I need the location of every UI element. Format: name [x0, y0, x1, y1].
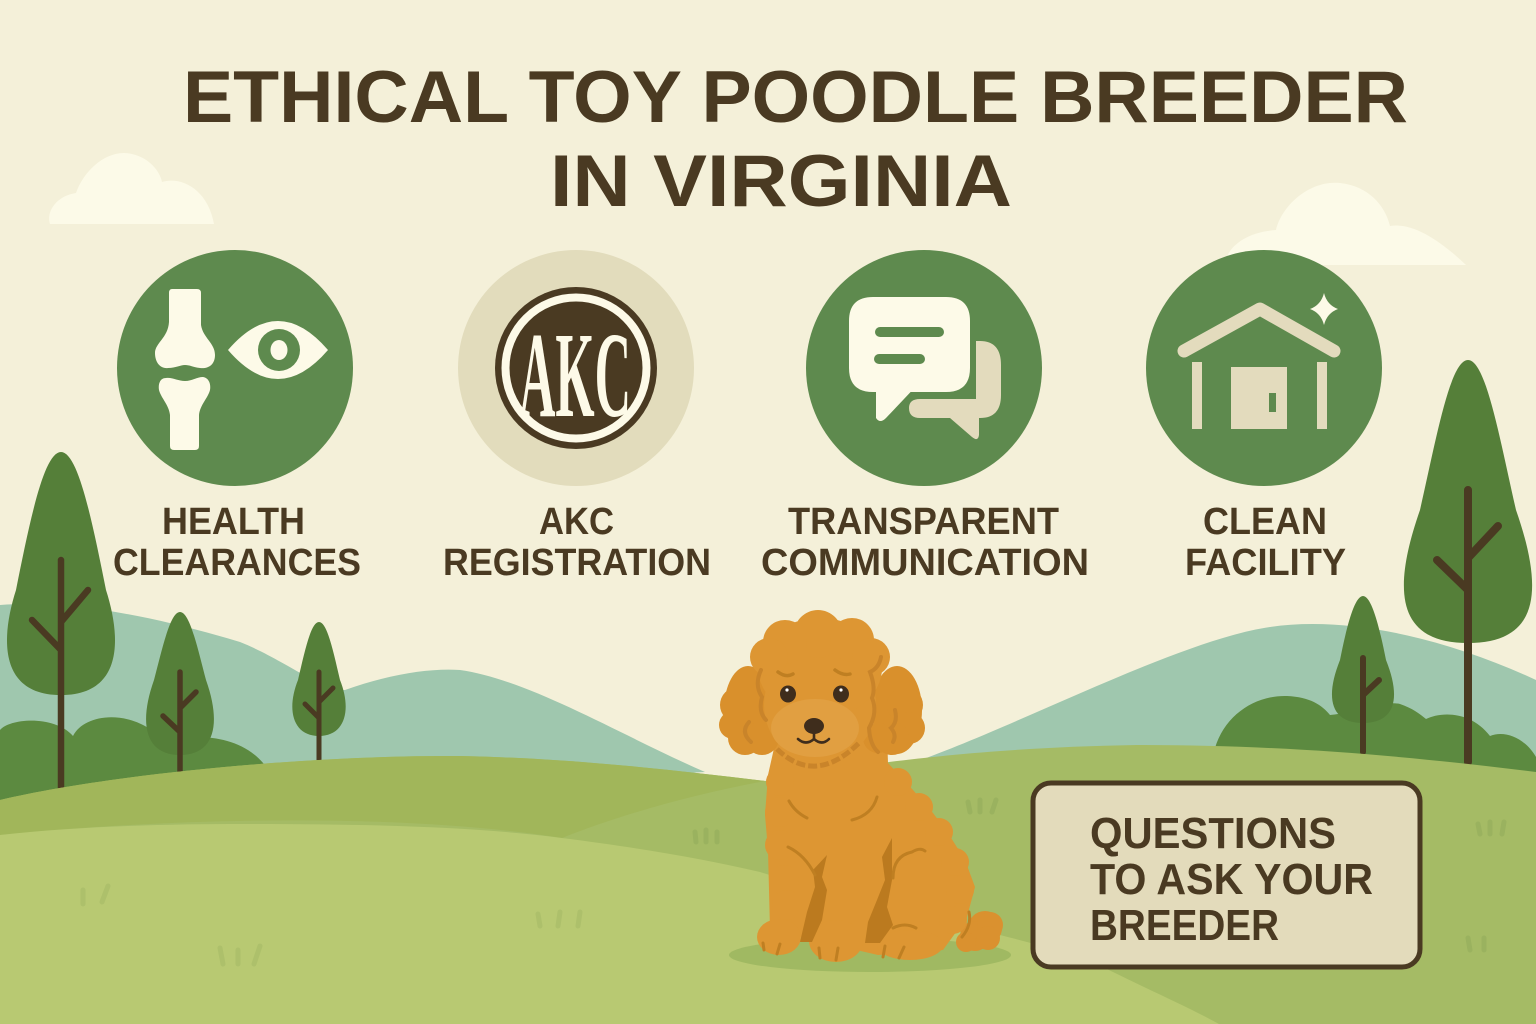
poodle leg gaps	[800, 838, 893, 943]
cloud: right	[1225, 183, 1466, 265]
tree: small left	[146, 612, 214, 775]
label: health clearances: CLEARANCES	[113, 542, 361, 584]
poodle eyes	[780, 686, 849, 702]
callout: questions to ask your breeder: QUESTIONS	[1090, 809, 1336, 858]
landscape: distant hills	[0, 604, 1536, 810]
title line 1: ETHICAL TOY POODLE BREEDER	[183, 57, 1408, 138]
bushes: right	[1215, 696, 1536, 790]
poodle fur lines	[763, 797, 970, 960]
callout: questions to ask your breeder	[1033, 783, 1420, 967]
grass tufts	[83, 800, 1504, 964]
callout: questions to ask your breeder: BREEDER	[1090, 901, 1279, 950]
callout: questions to ask your breeder: TO ASK YOUR	[1090, 855, 1373, 904]
icon: AKC seal: AKC	[519, 308, 631, 443]
tree: large right	[1404, 360, 1532, 762]
poodle illustration	[719, 610, 1011, 972]
label: transparent communication: COMMUNICATION	[761, 542, 1089, 584]
icon: AKC seal	[458, 250, 694, 486]
poodle collar	[777, 743, 859, 766]
title	[183, 57, 1408, 222]
label: transparent communication: TRANSPARENT	[788, 501, 1059, 543]
label: AKC registration	[443, 501, 711, 584]
label: health clearances	[113, 501, 361, 584]
cloud: left	[49, 153, 214, 224]
landscape: hill shading	[0, 756, 765, 838]
poodle head fur lines	[745, 657, 896, 752]
poodle nose and mouth	[798, 718, 829, 742]
label: clean facility: CLEAN	[1203, 501, 1327, 543]
bushes: left	[0, 717, 267, 800]
title line 2: IN VIRGINIA	[550, 141, 1012, 222]
icon: health clearances (bone joint and eye)	[117, 250, 353, 486]
poodle ears	[719, 666, 925, 755]
label: AKC registration: REGISTRATION	[443, 542, 711, 584]
icon: clean facility (house and sparkle)	[1146, 250, 1382, 486]
poodle muzzle	[771, 699, 859, 757]
poodle body	[757, 735, 975, 962]
poodle tail	[956, 911, 1003, 952]
label: clean facility	[1185, 501, 1346, 584]
landscape: foreground hill	[0, 824, 1219, 1024]
label: AKC registration: AKC	[539, 501, 614, 543]
landscape: middle hill	[0, 745, 1536, 1024]
tree: small right	[1332, 596, 1394, 752]
tree: smallest left	[292, 622, 346, 762]
label: health clearances: HEALTH	[162, 501, 305, 543]
label: clean facility: FACILITY	[1185, 542, 1346, 584]
poodle head	[750, 610, 890, 763]
label: transparent communication	[761, 501, 1089, 584]
icon: transparent communication (speech bubbles)	[806, 250, 1042, 486]
tree: large left	[7, 452, 115, 790]
poodle ground shadow	[729, 938, 1011, 972]
poodle eyebrows	[778, 670, 850, 676]
